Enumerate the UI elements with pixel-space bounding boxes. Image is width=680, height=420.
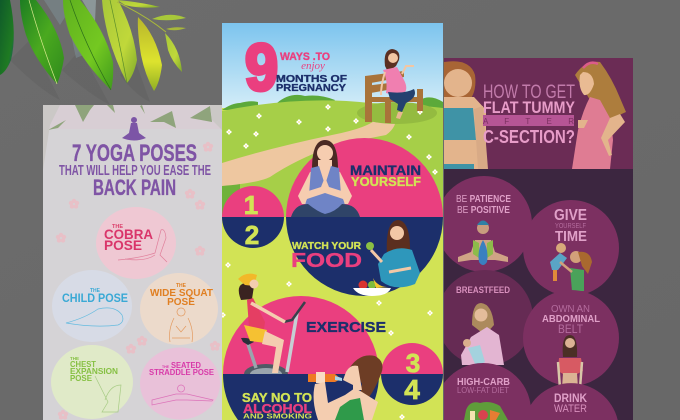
tip: breastfeed: BREASTFEED [456, 285, 510, 295]
bench [365, 71, 423, 123]
step 4: say no: SAY NO TO [242, 391, 312, 405]
title: yoga: 7 YOGA POSES [72, 140, 197, 167]
pose: seated straddle [140, 348, 220, 420]
pose: wide squat: WIDE SQUAT [150, 288, 213, 299]
pose: cobra: THE [112, 224, 123, 230]
daisies [220, 104, 438, 420]
mother and child [550, 243, 592, 291]
pose: wide squat: THE [176, 283, 187, 289]
pose: seated straddle: STRADDLE POSE [149, 368, 215, 377]
bushes [222, 95, 443, 112]
tip: be patience: BE PATIENCE [456, 194, 511, 205]
tip: give yourself time [523, 200, 619, 296]
title: nine ways: 9 [245, 30, 278, 104]
step 3: exercise [223, 274, 386, 374]
tip: abdominal belt [523, 290, 619, 390]
title: yoga: THAT WILL HELP YOU EASE THE [59, 162, 211, 179]
title: flat tummy: C-SECTION? [483, 127, 575, 147]
tip: high carb: LOW-FAT DIET [457, 386, 509, 395]
step 3-4 badge: 3 [406, 348, 420, 378]
step 2: watch your food: WATCH YOUR [292, 241, 362, 252]
step 1-2 badge [222, 186, 284, 250]
pose: cobra: POSE [104, 237, 142, 253]
title: nine ways: MONTHS OF [276, 74, 347, 85]
pose: chest expansion [51, 345, 133, 419]
step 2: watch your food: FOOD [291, 250, 362, 272]
vegetables [464, 402, 508, 420]
meditating man [458, 220, 508, 265]
decorative blossoms [56, 142, 220, 420]
pathway [222, 118, 396, 186]
panel: pregnancy [220, 23, 443, 420]
pose: child: THE [90, 288, 101, 294]
title: nine ways: enjoy [301, 60, 325, 72]
tip: high carb: HIGH-CARB [457, 377, 510, 388]
pose: child [52, 270, 132, 342]
title: nine ways: WAYS .TO [280, 51, 330, 63]
step 4: say no: ALCOHOL [243, 402, 312, 416]
panel: yoga poses [43, 105, 222, 420]
woman on bike [238, 274, 305, 374]
shadow under bench [357, 102, 437, 124]
tip: be patience: BE POSITIVE [457, 205, 510, 216]
woman in crop top [558, 335, 583, 390]
step 2: watch your food [286, 217, 443, 296]
title: flat tummy: A F T E R [483, 117, 574, 126]
tip: give yourself time: GIVE [554, 207, 587, 224]
pose: chest expansion: THE [70, 356, 79, 361]
title: yoga [59, 144, 211, 196]
step 1: maintain yourself: MAINTAIN [350, 163, 421, 178]
step 3-4 badge [381, 343, 443, 405]
pose: wide squat: POSE [167, 297, 195, 308]
title: nine ways: PREGNANCY [276, 83, 346, 94]
tip: be patience [436, 176, 532, 272]
pose: chest expansion: POSE [70, 373, 92, 383]
pose: child: CHILD POSE [62, 293, 128, 305]
step 1: maintain yourself [286, 138, 443, 217]
woman in teal top [444, 61, 488, 169]
tip: high carb [435, 363, 531, 420]
seated pregnant woman [381, 49, 415, 119]
tip: give yourself time: YOURSELF [555, 223, 586, 230]
pose: chest expansion: EXPANSION [70, 366, 118, 376]
hanging leaves [0, 0, 186, 105]
woman drinking [308, 355, 383, 420]
title: flat tummy [483, 84, 575, 143]
woman with apple [353, 220, 420, 296]
nursing mother [461, 303, 504, 366]
fruit bowl [353, 278, 391, 296]
pregnant woman in pink [572, 62, 626, 169]
panel: flat tummy [435, 58, 633, 420]
sky [222, 23, 443, 108]
tip: abdominal belt: BELT [558, 322, 584, 336]
tip: drink water [524, 383, 618, 420]
icon: meditating figure [122, 117, 146, 140]
hill [222, 100, 443, 217]
pose: seated straddle: THE [162, 365, 170, 369]
pose: wide squat [140, 273, 218, 345]
step 1-2 badge: 1 [244, 190, 258, 220]
tip: drink water: WATER [554, 403, 587, 415]
pose: cobra [96, 207, 176, 279]
title: flat tummy: HOW TO GET [483, 82, 575, 103]
title: yoga: BACK PAIN [93, 175, 176, 200]
title: nine ways [245, 42, 347, 92]
meditating woman [291, 140, 360, 217]
pose: chest expansion: CHEST [70, 359, 97, 369]
tip: abdominal belt: OWN AN [551, 304, 590, 315]
step 1: maintain yourself: YOURSELF [351, 174, 421, 189]
step 3: exercise: EXERCISE [306, 320, 386, 336]
tip: abdominal belt: ABDOMINAL [542, 313, 601, 325]
tip: drink water: DRINK [554, 393, 588, 405]
step 3-4 badge: 4 [404, 374, 420, 405]
step 1-2 badge: 2 [245, 220, 259, 250]
tip: breastfeed [437, 270, 533, 366]
step 4: say no [223, 355, 383, 420]
pose: seated straddle: SEATED [171, 361, 201, 370]
pose: cobra: COBRA [104, 226, 153, 242]
title: flat tummy: FLAT TUMMY [483, 99, 575, 117]
tip: give yourself time: TIME [555, 228, 587, 245]
